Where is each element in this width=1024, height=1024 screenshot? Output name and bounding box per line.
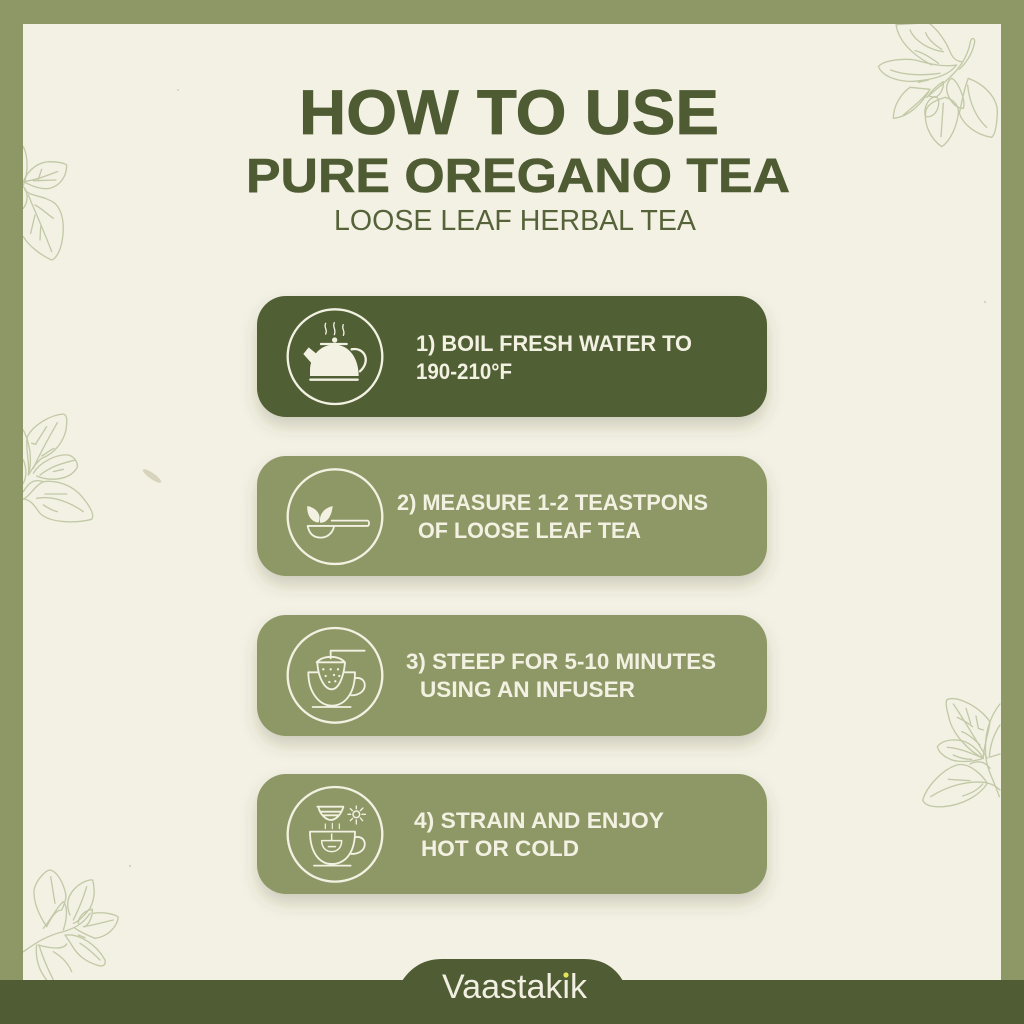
step 3 text: 3) STEEP FOR 5-10 MINUTES [406,649,716,674]
heading line 2: PURE OREGANO TEA [246,150,790,203]
footer bar [0,959,1024,1024]
step 1 text [416,331,692,384]
leaf sprig: top right [878,23,997,147]
subtitle: LOOSE LEAF HERBAL TEA [334,205,697,237]
step 4 text: 4) STRAIN AND ENJOY [414,808,664,833]
icon: cup with infuser [288,628,382,723]
icon: spoon with leaves [288,469,382,564]
step 2 text: OF LOOSE LEAF TEA [418,518,641,543]
step 2 card [257,456,767,576]
brand name: Vaastakik [442,968,588,1006]
leaf sprig: upper left [23,147,67,260]
step 3 card [257,615,767,736]
brand dot [563,972,569,978]
step 1 text: 1) BOIL FRESH WATER TO [416,331,692,356]
icon: kettle [288,309,382,404]
step 3 text [406,649,716,702]
step 2 text: 2) MEASURE 1-2 TEASTPONS [397,490,708,515]
paper flecks [129,89,986,867]
icon: strainer and cup [288,787,382,882]
leaf sprig: lower right [923,699,1000,807]
title [246,78,790,237]
leaf sprig: bottom left [23,870,118,980]
leaf sprig: middle left [23,414,93,522]
step 1 text: 190-210°F [416,359,512,384]
step 4 card [257,774,767,894]
step 1 card [257,296,767,417]
heading line 1: HOW TO USE [299,78,719,148]
step 4 text: HOT OR COLD [421,836,579,861]
step 2 text [397,490,708,543]
step 3 text: USING AN INFUSER [420,677,635,702]
step 4 text [414,808,664,861]
